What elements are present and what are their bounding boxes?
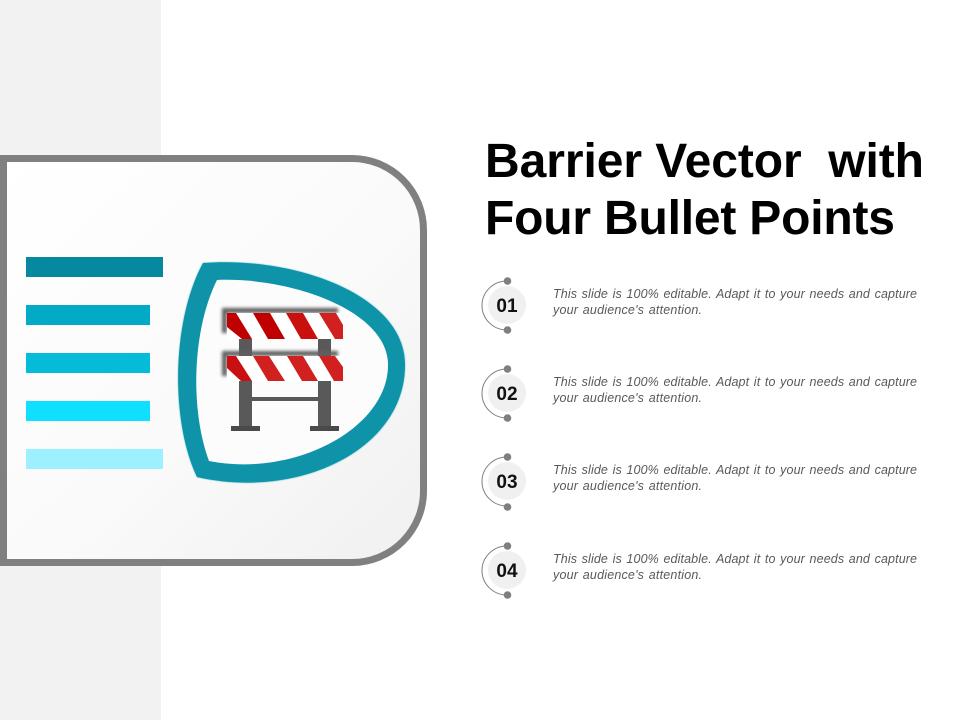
bullet 02: 02 <box>496 384 518 405</box>
D-shaped teal badge <box>178 262 405 483</box>
bullet 04: 04 <box>496 561 518 582</box>
barrier shadows <box>222 308 338 376</box>
bullet 04 <box>482 542 917 599</box>
bullet 04: your audience's attention. <box>552 568 702 582</box>
bullet 02: your audience's attention. <box>552 391 702 405</box>
title: Barrier Vector with <box>485 135 924 188</box>
bullet 03: 03 <box>496 472 518 493</box>
icon: road barrier <box>222 308 343 431</box>
top board <box>227 313 343 339</box>
bullet 02 <box>482 365 917 422</box>
title: Four Bullet Points <box>485 192 895 245</box>
bullet 03: This slide is 100% editable. Adapt it to your needs and capture <box>553 463 917 477</box>
panel: rounded frame <box>4 158 424 562</box>
bullet 02: This slide is 100% editable. Adapt it to your needs and capture <box>553 375 917 389</box>
bottom board <box>227 356 343 381</box>
title <box>485 135 924 245</box>
bullet 01 <box>482 277 917 334</box>
bullet 03: your audience's attention. <box>552 479 702 493</box>
bullet 01: your audience's attention. <box>552 303 702 317</box>
bullet 01: This slide is 100% editable. Adapt it to your needs and capture <box>553 287 917 301</box>
barrier legs <box>231 339 339 431</box>
bullet 04: This slide is 100% editable. Adapt it to your needs and capture <box>553 552 917 566</box>
list bars <box>26 257 163 469</box>
bullet 01: 01 <box>496 296 518 317</box>
bullet 03 <box>482 453 917 511</box>
sidebar background <box>0 0 161 720</box>
